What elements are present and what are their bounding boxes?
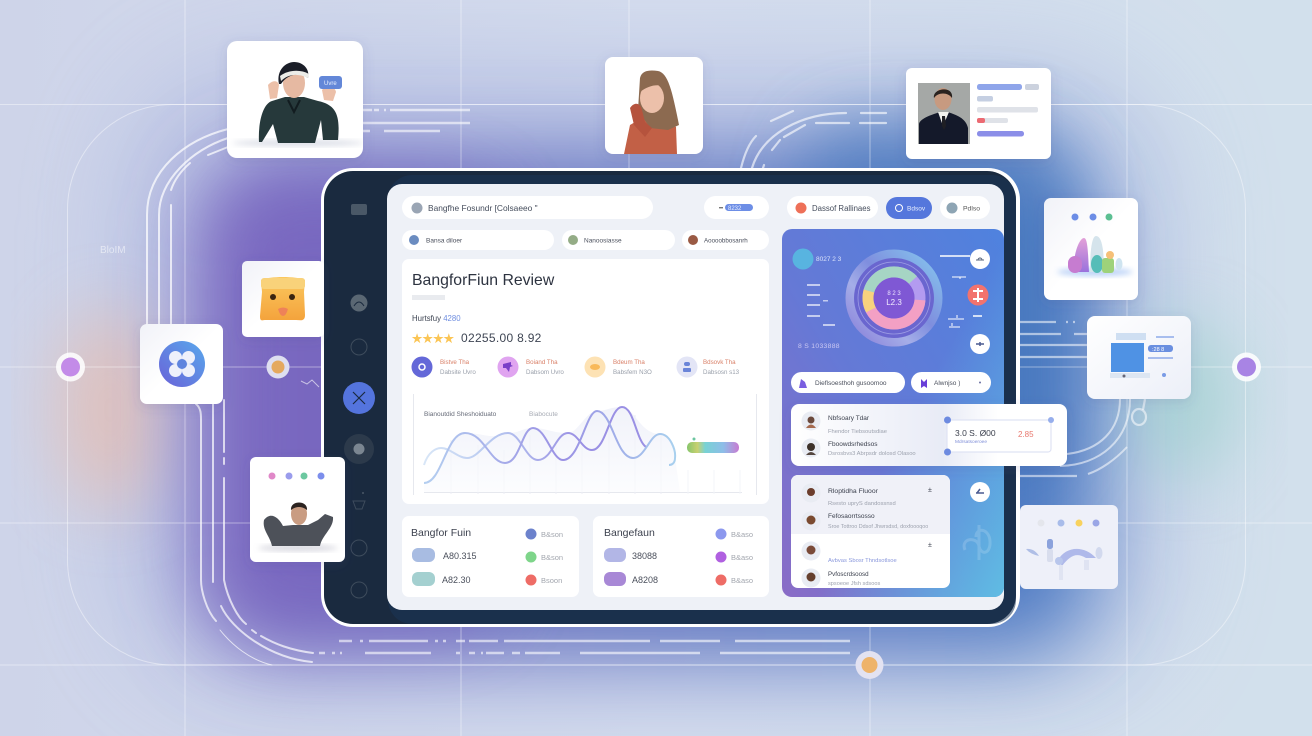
profile bars [977,84,1039,136]
stats card right: 38088 [632,551,657,561]
dashed lines: bottom [319,641,850,653]
icon: circle bottom [351,582,367,598]
circuit lines: upper right [741,111,886,168]
badge pill [704,196,769,219]
circuit lines: upper left [147,129,228,330]
card: logo [140,324,223,404]
card: blue window: :28 8 [1152,347,1164,353]
dot red [716,574,726,586]
metric 2: Boiand Tha [526,359,558,366]
stats card right: B&aso [731,576,753,585]
filter pill 1: Bansa diloer [426,238,463,244]
heading: BangforFiun Review [412,272,555,289]
right gradient panel [782,229,1067,597]
card: profile with suit [906,68,1051,159]
metric 3 [584,356,652,378]
value box: Mdrsatsoeroee [955,439,987,445]
metric 4: Bdsovk Tha [703,359,736,366]
chart axes [414,394,756,495]
tablet frame [321,168,1020,627]
icon: active close [343,382,375,414]
faint watermark icon [964,525,990,560]
action pill 1 [791,372,905,393]
thumb [412,548,435,562]
action pill 1: Dieflsoesthoh gusoomoo [815,380,887,387]
stats card left: A82.30 [442,575,471,585]
stats card right [593,516,769,597]
avatar [802,568,820,588]
avatar [802,438,820,458]
value box: 2.85 [1018,430,1034,439]
filter pill 2 [562,230,675,250]
series dark [424,411,675,483]
icon: circle lower [351,540,367,556]
line chart [414,394,756,495]
metric 3: Babsfem N3O [613,369,652,376]
donut chart [846,250,942,346]
user pill [787,196,878,219]
donut chart: L2.3 [886,298,902,307]
action pill 2 [911,372,991,393]
icon: curve [350,294,368,312]
chart gridlines faint [688,470,740,494]
stats card right: B&aso [731,553,753,562]
card: blue window [1087,316,1191,399]
stars: ★★★★ [411,331,455,346]
stats card right: Bangefaun [604,527,655,539]
metric 1 [412,356,476,378]
color scale [687,438,739,453]
list card bottom: Rsesto upryS dandossnsd [828,501,896,507]
marker: centre left [266,356,290,378]
metric 2: Dabsom Uvro [526,369,564,376]
metric 2 [498,356,564,378]
chat bubble: Uvre [324,81,337,87]
filter pill 3: Aoooobbosanrh [704,238,748,244]
shapes [1057,236,1133,276]
series light [424,407,646,465]
chart title: Bianoutdid Sheshoiduato [424,411,497,418]
stats card right: B&aso [731,530,753,539]
chart gridlines [451,415,661,494]
list card bottom: Pvfoscrdsoosd [828,571,869,578]
profile pill: Pdlso [963,206,980,212]
stats card left: A80.315 [443,551,477,561]
chart legend: Biabocute [529,411,558,418]
dashed lines: top [363,110,470,131]
panel badge [792,248,842,270]
dot green [526,552,536,562]
filter pill 2: Nanoosiasse [584,238,622,244]
list card top: Fboowdsrhedsos [828,441,878,448]
right annotation lines [940,256,982,327]
round button red [968,284,988,306]
dashboard screen [56,41,1261,679]
stats card right: A8208 [632,575,658,585]
left legend bars [807,284,835,326]
icon: record [344,434,374,464]
metric 4: Dabsosn s13 [703,369,740,376]
dot red [526,574,536,586]
active blue pill [886,197,932,219]
round button bottom [970,334,990,354]
list card bottom: Fefosaorrtsosso [828,513,875,520]
panel badge: 8027 2 3 [816,256,842,263]
stats card left: Bangfor Fuin [411,527,471,539]
metric 1: Bistve Tha [440,359,470,366]
icon: empty circle [351,339,367,355]
round button top [970,249,990,269]
badge pill: 8232 [728,206,742,212]
connector lines: right [1020,322,1146,476]
icon: menu [351,204,367,215]
marker: left [56,352,85,382]
label: Blok: BloIM [100,245,126,256]
metric 1: Dabsite Uvro [440,369,476,376]
portrait [918,83,970,144]
donut chart: 8 2 3 [887,291,901,297]
filter pill 3 [682,230,769,250]
avatar [802,484,820,502]
list card bottom: Rloptidha Fluoor [828,488,879,495]
card: man with hat [227,41,364,158]
chart area [424,407,680,492]
review card [402,259,769,504]
value box: 3.0 S. Ø00 [955,428,996,438]
filter pill 1 [402,230,554,250]
list card top: Nbfsoary Tdar [828,415,870,422]
dot blue [526,528,536,540]
rating label: Hurtsfuy 4280 [412,314,461,323]
profile pill [940,196,990,219]
marker: bottom [856,651,884,679]
icon: triangle [353,492,365,509]
avatar [802,542,820,560]
active blue pill: Bdsov [907,206,926,212]
rating value: 02255.00 8.92 [461,331,542,345]
search pill [402,196,653,219]
action pill 2: Alwnjso ) [934,380,960,387]
circuit lines: lower left [196,400,313,665]
subtitle bar [412,295,445,300]
dot blue [716,528,726,540]
search pill: Bangfhe Fosundr [Colsaeeo " [428,203,538,213]
metric 3: Bdeum Tha [613,359,645,366]
card: colourful chart icon [1044,198,1138,300]
marker: right [1232,352,1261,382]
list card bottom: Avbvas Sbosr Thndsotlsoe [828,558,897,564]
list card top: Dsrosbvs3 Abrpsdr dolosd Olasoo [828,451,916,457]
card: chick mascot [242,261,324,337]
list card bottom [791,475,950,588]
card: man in sweater [250,457,345,562]
illustration [1026,539,1102,580]
list card top [791,404,1067,466]
user pill: Dassof Rallinaes [812,204,871,213]
card: woman in red jacket [605,57,703,154]
list card bottom: Sroe Tottroo Ddsof Jhwrsdsd, doxfoooqoo [828,524,928,530]
card: translucent illustration [1020,505,1118,589]
icon: logo [159,341,205,387]
small wave line [301,380,319,387]
thumb [412,572,435,586]
avatar [802,512,820,530]
dot purple [716,552,726,562]
list card bottom: ± [928,542,932,549]
value box [944,416,1054,456]
list card bottom: spsoeoe Jfsh sdsoos [828,581,880,587]
avatar [802,412,820,430]
metric 4 [676,356,740,378]
thumb [604,548,626,562]
thumb [604,572,626,586]
stats card left: Bsoon [541,576,562,585]
stats card left [402,516,579,597]
stats card left: B&son [541,553,563,562]
round button lower [970,482,990,502]
list card bottom: ± [928,487,932,494]
panel note: 8 S 1033888 [798,343,840,350]
list card top: Fhendor Tiebsoutsdiae [828,429,887,435]
sidebar [343,204,375,598]
stats card left: B&son [541,530,563,539]
